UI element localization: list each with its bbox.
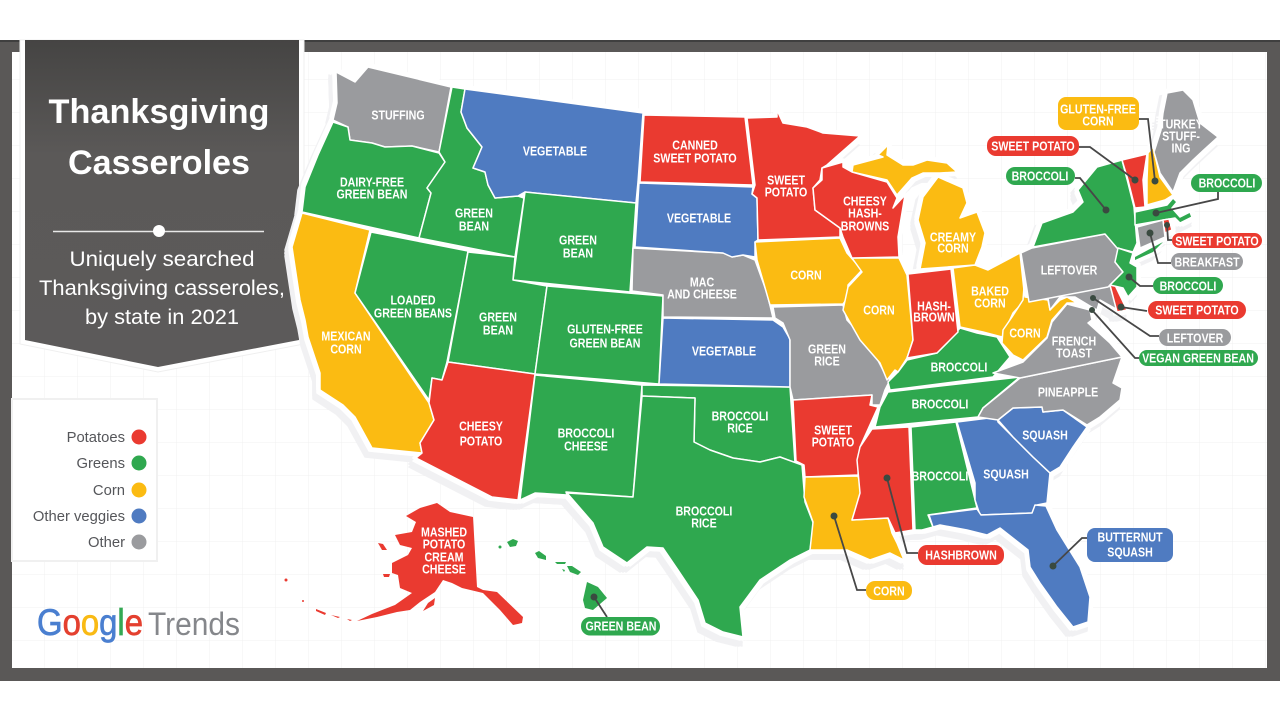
state: Vermont xyxy=(1122,154,1147,208)
subtitle: Uniquely searched xyxy=(70,247,255,271)
callout: hashbrown (Mississippi) xyxy=(884,474,1004,565)
state: Colorado: GREEN BEAN xyxy=(569,336,641,351)
state: Utah: GREEN xyxy=(479,310,517,325)
callout: corn (Louisiana) xyxy=(830,512,912,600)
state: Texas: BROCCOLI xyxy=(676,504,732,519)
state: Hawaii xyxy=(498,539,607,610)
state: Wisconsin: BROWNS xyxy=(841,219,889,234)
state: Iowa: CORN xyxy=(790,268,822,283)
state: Indiana xyxy=(907,269,958,358)
state: Maine: ING xyxy=(1172,141,1190,156)
Google Trends logo: Google xyxy=(37,602,143,643)
state: Missouri: RICE xyxy=(814,354,840,369)
state: Mississippi xyxy=(852,427,913,533)
state: Virginia xyxy=(993,304,1122,378)
state: Virginia: TOAST xyxy=(1056,346,1093,361)
state: South Carolina: SQUASH xyxy=(1022,428,1068,443)
state: North Dakota: SWEET POTATO xyxy=(653,151,737,166)
callout: broccoli (New York): BROCCOLI xyxy=(1012,169,1068,184)
title: Casseroles xyxy=(68,144,250,182)
state: Florida xyxy=(929,505,1090,627)
state: Tennessee: BROCCOLI xyxy=(912,397,968,412)
divider with dot xyxy=(53,225,264,237)
state: Utah: BEAN xyxy=(483,323,513,338)
state: New Mexico: BROCCOLI xyxy=(558,426,614,441)
state: Kansas: VEGETABLE xyxy=(692,344,756,359)
state: Maine xyxy=(1154,90,1218,192)
state: Michigan lower: CORN xyxy=(937,241,969,256)
state: West Virginia xyxy=(1002,287,1077,360)
subtitle xyxy=(39,247,285,329)
state: Alabama: BROCCOLI xyxy=(912,469,968,484)
state: California xyxy=(292,213,434,453)
state: Idaho: GREEN xyxy=(455,206,493,221)
callout: sweet potato (Rhode Island): SWEET POTATO xyxy=(1175,234,1259,249)
state: Missouri xyxy=(773,305,890,405)
state: Montana: VEGETABLE xyxy=(523,144,587,159)
legend: corn xyxy=(93,482,146,499)
state: Alabama xyxy=(911,422,977,530)
state: Delaware xyxy=(1110,285,1127,312)
callout: corn (Louisiana): CORN xyxy=(873,584,905,599)
callout: breakfast (Connecticut) xyxy=(1146,230,1243,270)
legend: greens: Greens xyxy=(76,456,125,472)
state: Nebraska: MAC xyxy=(690,275,715,290)
legend xyxy=(12,399,157,561)
state: North Carolina: PINEAPPLE xyxy=(1038,385,1098,400)
state: Michigan upper xyxy=(852,145,957,195)
state: North Carolina xyxy=(978,357,1122,425)
state: Pennsylvania: LEFTOVER xyxy=(1041,263,1098,278)
callout: butternut squash (Florida) xyxy=(1050,528,1173,570)
state: Texas xyxy=(567,396,814,637)
state: Alaska: POTATO xyxy=(423,537,465,552)
state: Utah xyxy=(448,252,547,374)
state: South Dakota xyxy=(635,183,758,257)
state: Nebraska: AND CHEESE xyxy=(667,287,737,302)
state: Virginia: FRENCH xyxy=(1052,334,1096,349)
subtitle: by state in 2021 xyxy=(85,305,239,329)
callout: broccoli (New York) xyxy=(1006,167,1110,214)
state: Wyoming xyxy=(513,192,636,292)
state: Illinois: CORN xyxy=(863,303,895,318)
state: Arizona: POTATO xyxy=(460,434,502,449)
state: Arizona xyxy=(416,362,535,500)
state: Nevada xyxy=(355,232,468,400)
callout: vegan green bean (DC): VEGAN GREEN BEAN xyxy=(1142,351,1254,366)
legend: other veggies: Other veggies xyxy=(33,509,125,525)
state: Massachusetts xyxy=(1135,198,1192,225)
state: Maine: TURKEY xyxy=(1159,117,1203,132)
state: Alaska: CHEESE xyxy=(422,562,466,577)
callout: butternut squash (Florida): SQUASH xyxy=(1107,545,1153,560)
state: Arkansas: POTATO xyxy=(812,435,854,450)
state: Oklahoma xyxy=(642,385,795,463)
state: Nebraska xyxy=(632,248,773,318)
subtitle: Thanksgiving casseroles, xyxy=(39,276,285,300)
legend: corn: Corn xyxy=(93,483,125,499)
state: Illinois xyxy=(843,258,913,380)
state: Idaho: BEAN xyxy=(459,219,489,234)
state: Indiana: HASH- xyxy=(917,299,951,314)
state: Kentucky xyxy=(888,328,1010,390)
state: Ohio xyxy=(953,253,1025,337)
state: Pennsylvania xyxy=(1021,234,1123,302)
state: Wisconsin xyxy=(813,162,905,258)
state: Alaska: MASHED xyxy=(421,525,467,540)
state: Rhode Island xyxy=(1163,219,1172,233)
title: Thanksgiving xyxy=(48,93,270,131)
state: New York xyxy=(1033,160,1137,252)
state: New Hampshire xyxy=(1147,147,1173,205)
Google Trends logo xyxy=(37,602,240,643)
callout: broccoli (New Jersey) xyxy=(1126,274,1223,294)
state: Oklahoma: BROCCOLI xyxy=(712,409,768,424)
state: Idaho xyxy=(419,87,524,257)
state: Oregon: DAIRY-FREE xyxy=(340,175,404,190)
state: Texas: RICE xyxy=(691,516,717,531)
callout: sweet potato (Rhode Island) xyxy=(1164,222,1262,249)
state: West Virginia: CORN xyxy=(1009,326,1041,341)
state: Ohio: CORN xyxy=(974,296,1006,311)
state: New Mexico: CHEESE xyxy=(564,439,608,454)
state: Ohio: BAKED xyxy=(971,284,1009,299)
callout: sweet potato (Vermont): SWEET POTATO xyxy=(991,139,1075,154)
state: Maryland xyxy=(1048,286,1118,310)
state: Connecticut xyxy=(1137,220,1165,248)
state: Oklahoma: RICE xyxy=(727,421,753,436)
Google Trends logo: Trends xyxy=(148,606,240,642)
state: Colorado xyxy=(535,286,663,384)
state: Georgia: SQUASH xyxy=(983,467,1029,482)
state: Tennessee xyxy=(875,377,1020,427)
state: Long Island xyxy=(1135,242,1163,260)
state: Oregon: GREEN BEAN xyxy=(336,187,408,202)
state: Arkansas xyxy=(793,395,878,477)
callout: gluten-free corn (New Hampshire): GLUTEN-FREE xyxy=(1060,102,1136,117)
legend: other xyxy=(88,534,146,551)
state: Minnesota xyxy=(747,110,860,240)
state: Michigan lower: CREAMY xyxy=(930,230,976,245)
state: Minnesota: SWEET xyxy=(767,173,806,188)
state: Washington: STUFFING xyxy=(371,108,425,123)
state: North Dakota xyxy=(640,115,753,185)
state: Louisiana xyxy=(804,476,904,560)
state: Nevada: LOADED xyxy=(391,293,436,308)
title banner xyxy=(20,40,304,372)
callout: broccoli (Massachusetts): BROCCOLI xyxy=(1199,176,1255,191)
callout: butternut squash (Florida): BUTTERNUT xyxy=(1098,530,1163,545)
callout: gluten-free corn (New Hampshire): CORN xyxy=(1082,114,1114,129)
state: Colorado: GLUTEN-FREE xyxy=(567,322,643,337)
callout: leftover (Maryland) xyxy=(1090,295,1231,346)
state: Wyoming: BEAN xyxy=(563,246,593,261)
callout: broccoli (Massachusetts) xyxy=(1152,174,1262,216)
legend: potatoes: Potatoes xyxy=(67,430,125,446)
state: North Dakota: CANNED xyxy=(672,138,718,153)
state: Indiana: BROWN xyxy=(913,310,955,325)
callout: green bean (Hawaii) xyxy=(581,594,660,636)
callout: gluten-free corn (New Hampshire) xyxy=(1058,97,1158,184)
state: Arkansas: SWEET xyxy=(814,423,853,438)
title xyxy=(48,93,270,182)
callout: leftover (Maryland): LEFTOVER xyxy=(1167,331,1224,346)
state: South Carolina xyxy=(998,407,1087,473)
state: Kansas xyxy=(659,318,790,387)
state: Wisconsin: HASH- xyxy=(848,206,882,221)
state: California: CORN xyxy=(330,342,362,357)
state: Missouri: GREEN xyxy=(808,342,846,357)
callout: breakfast (Connecticut): BREAKFAST xyxy=(1175,255,1240,270)
legend: greens xyxy=(76,456,146,472)
state: Alaska xyxy=(284,503,523,625)
state: Wyoming: GREEN xyxy=(559,233,597,248)
state: Nevada: GREEN BEANS xyxy=(374,306,452,321)
state: New Mexico xyxy=(520,375,642,500)
callout: sweet potato (Vermont) xyxy=(987,136,1138,184)
state: Washington xyxy=(333,67,451,152)
state: South Dakota: VEGETABLE xyxy=(667,211,731,226)
callout: sweet potato (Delaware) xyxy=(1118,301,1246,319)
state: Montana xyxy=(461,89,643,203)
state: Georgia xyxy=(957,417,1050,515)
state: Arizona: CHEESY xyxy=(459,419,503,434)
callout: vegan green bean (DC) xyxy=(1089,307,1258,366)
state: Minnesota: POTATO xyxy=(765,185,807,200)
state: Kentucky: BROCCOLI xyxy=(931,360,987,375)
state: California: MEXICAN xyxy=(321,329,371,344)
callout: hashbrown (Mississippi): HASHBROWN xyxy=(925,548,997,563)
state: Maine: STUFF- xyxy=(1162,129,1200,144)
legend: other: Other xyxy=(88,535,125,551)
state: Iowa xyxy=(755,238,862,305)
state: Alaska: CREAM xyxy=(424,550,464,565)
US map xyxy=(292,67,1218,637)
callout: green bean (Hawaii): GREEN BEAN xyxy=(585,619,657,634)
state: New Jersey xyxy=(1110,248,1137,297)
state: Michigan lower xyxy=(918,177,985,269)
state: Oregon xyxy=(302,122,445,238)
callout: broccoli (New Jersey): BROCCOLI xyxy=(1160,279,1216,294)
state: Wisconsin: CHEESY xyxy=(843,194,887,209)
callout: sweet potato (Delaware): SWEET POTATO xyxy=(1155,303,1239,318)
